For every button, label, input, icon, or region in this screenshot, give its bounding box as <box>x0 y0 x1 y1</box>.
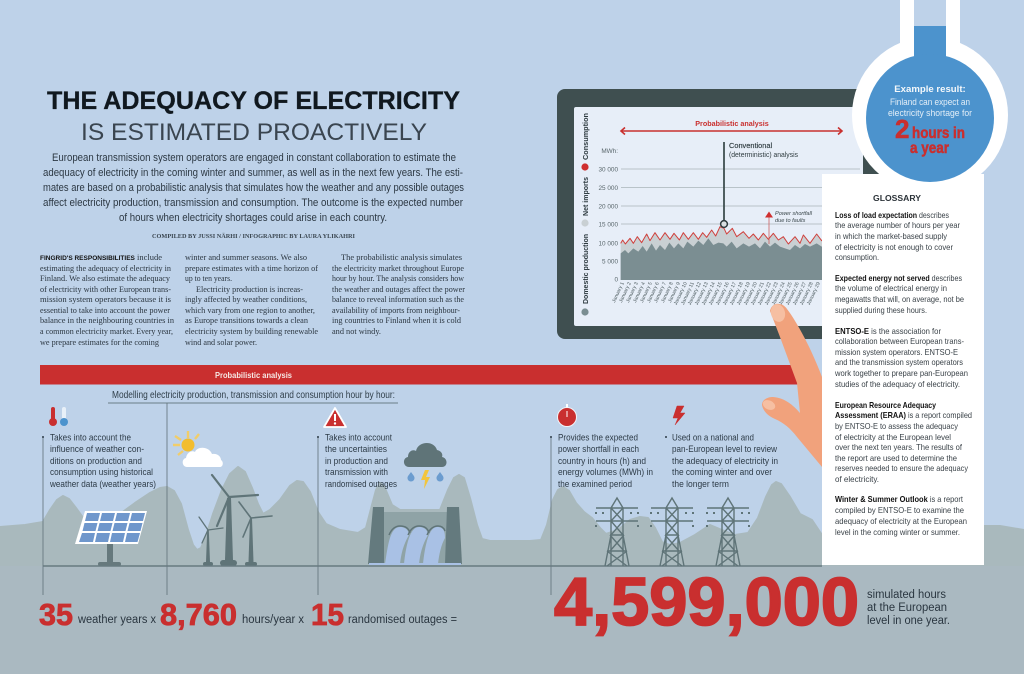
chart y axis: 15 000 <box>598 222 618 228</box>
equation: simulation counts: 8,760 <box>160 597 237 632</box>
example result flask: hours in <box>912 125 965 142</box>
body text column 2: up to ten years. <box>185 273 232 283</box>
chart x axis dates: January 12 <box>687 281 703 306</box>
total caption: level in one year. <box>867 615 950 627</box>
glossary: loss of load expectation: the average number of hours per year <box>835 220 960 230</box>
glossary: ERAA: by ENTSO-E to assess the adequacy <box>835 421 959 431</box>
text: weather: weather data (weather years) <box>49 479 156 490</box>
text: weather: ditions on production and <box>50 456 142 467</box>
body text column 1: of electricity with other European trans- <box>40 284 171 294</box>
marker: conventional analysis <box>721 141 798 227</box>
body text column 3: the weather and outages affect the power <box>332 284 465 294</box>
chart x axis dates: January 25 <box>778 281 794 306</box>
chart x axis dates: January 4 <box>632 281 647 304</box>
glossary: expected energy not served <box>835 273 964 315</box>
glossary: ENTSO-E: collaboration between European trans- <box>835 336 964 346</box>
chart areas <box>621 227 843 280</box>
glossary: expected energy not served: the volume of electrical energy in <box>835 283 947 293</box>
glossary: winter and summer outlook: level in the coming winter or summer. <box>835 527 960 537</box>
chart x axis dates: January 7 <box>653 281 668 304</box>
chart x axis dates: January 8 <box>660 281 675 304</box>
chart y axis: 25 000 <box>598 185 618 192</box>
body text column 1: FINGRID'S RESPONSIBILITIES include <box>40 252 162 262</box>
body text column 2 <box>185 252 318 347</box>
body text column 3 <box>332 252 465 336</box>
chart y axis: 0 <box>614 276 618 284</box>
landscape: mountains and ground <box>0 467 1024 674</box>
body text column 2: winter and summer seasons. We also <box>185 252 307 262</box>
text: weather <box>42 432 156 490</box>
glossary panel: GLOSSARY <box>873 193 921 203</box>
body text column 1: essential to take into account the power <box>40 305 170 315</box>
body text column 1: we prepare estimates for the coming <box>40 337 160 347</box>
chart x axis dates: January 6 <box>646 281 661 304</box>
chart y axis: 10 000 <box>598 240 618 248</box>
equation: simulation counts: hours/year x <box>242 614 304 626</box>
credits: COMPILED BY JUSSI NÄRHI / INFOGRAPHIC BY LAURA YLIKAHRI <box>152 233 355 240</box>
icon: pylon 2 <box>651 498 693 566</box>
glossary: loss of load expectation: of electricity is not enough to cover <box>835 242 953 252</box>
equation: simulation counts: 35 <box>39 597 73 632</box>
chart legend: Domestic production <box>581 234 590 304</box>
text: national review: pan-European level to review <box>672 444 777 455</box>
body text column 2: ingly affected by weather conditions, <box>185 294 307 304</box>
title: IS ESTIMATED PROACTIVELY <box>81 119 427 146</box>
text: power shortfall: power shortfall in each <box>558 444 639 455</box>
intro text: affect electricity production, transmission and consumption. The outcome is the expected number <box>43 197 463 209</box>
glossary: ERAA: the report are used to determine the <box>835 453 957 463</box>
chart x axis dates: January 19 <box>736 281 752 306</box>
icon: lightning bolt <box>673 406 685 425</box>
icon: stopwatch <box>558 404 576 426</box>
chart x axis dates: January 26 <box>785 281 801 306</box>
text: outages <box>317 432 397 490</box>
glossary: loss of load expectation: consumption. <box>835 252 879 262</box>
glossary: ERAA <box>835 400 972 484</box>
chart x axis dates <box>611 281 822 306</box>
tablet with chart <box>557 89 887 339</box>
example result flask <box>852 0 1008 193</box>
chart x axis dates: January 27 <box>792 281 808 306</box>
body text column 1: mission system operators because it is <box>40 294 172 304</box>
chart x axis dates: January 11 <box>680 281 696 306</box>
body text column 3: balance to reveal information such as the <box>332 294 464 304</box>
red bar: probabilistic analysis <box>40 365 802 384</box>
glossary: ENTSO-E <box>834 326 968 389</box>
glossary: loss of load expectation: in which the market-based supply <box>835 231 948 241</box>
chart y axis <box>598 148 860 284</box>
chart x axis dates: January 24 <box>771 281 787 306</box>
ground line <box>43 565 822 567</box>
body text column 1: balance in the neighbouring countries in <box>40 315 175 325</box>
body text column 2: prepare estimates with a time horizon of <box>185 263 318 273</box>
text: power shortfall: the examined period <box>558 479 632 490</box>
icon: hydro dam <box>368 507 462 565</box>
glossary: winter and summer outlook: compiled by ENTSO-E to examine the <box>835 505 964 515</box>
equation: simulation counts: randomised outages = <box>348 614 457 626</box>
chart y axis: 5 000 <box>602 258 618 266</box>
chart x axis dates: January 1 <box>611 281 626 304</box>
title: THE ADEQUACY OF ELECTRICITY <box>47 87 460 115</box>
chart x axis dates: January 9 <box>667 281 682 304</box>
glossary: winter and summer outlook <box>835 494 967 537</box>
intro text <box>43 152 464 224</box>
chart x axis dates: January 5 <box>639 281 654 304</box>
example result flask: Finland can expect an <box>890 96 970 107</box>
glossary: expected energy not served: supplied during these hours. <box>835 305 927 315</box>
body text column 2: as Europe transitions towards a clean <box>185 315 309 325</box>
example result flask: 2 <box>895 114 909 144</box>
total caption: at the European <box>867 602 947 614</box>
intro text: European transmission system operators are engaged in constant collaboration to estimate the <box>52 152 456 164</box>
total caption <box>867 589 950 627</box>
text: national review: Used on a national and <box>672 432 754 444</box>
body text column 2: which vary from one region to another, <box>185 305 315 315</box>
title <box>47 87 460 146</box>
text: power shortfall <box>550 432 653 490</box>
chart x axis dates: January 29 <box>806 281 822 306</box>
marker: power shortfall: due to faults <box>775 218 806 224</box>
chart y axis: MWh: <box>601 148 618 155</box>
chart legend: Net imports <box>581 177 590 216</box>
text: outages: Takes into account <box>325 432 392 444</box>
text: outages: randomised outages <box>325 479 397 490</box>
glossary: ENTSO-E: work together to prepare pan-European <box>834 368 968 378</box>
hand pointing at chart <box>761 302 830 480</box>
equation: simulation counts: weather years x <box>77 614 156 626</box>
chart x axis dates: January 14 <box>701 281 717 306</box>
text: national review: the longer term <box>672 479 729 490</box>
body text column 2: electricity system by building renewable <box>185 326 318 336</box>
body text column 1: estimating the adequacy of electricity in <box>40 263 172 273</box>
glossary: ERAA: of electricity at the European level <box>835 432 951 442</box>
chart y axis: 20 000 <box>598 204 618 210</box>
text: power shortfall: Provides the expected <box>558 432 638 444</box>
chart x axis dates: January 15 <box>708 281 724 306</box>
body text column 1: Finland. We also estimate the adequacy <box>40 273 171 283</box>
text: weather: influence of weather con- <box>50 444 144 455</box>
chart x axis dates: January 28 <box>799 281 815 306</box>
chart legend <box>581 113 590 316</box>
icon: pylon 1 <box>596 498 638 566</box>
total caption: simulated hours <box>867 589 946 601</box>
glossary: expected energy not served: Expected energy not served describes <box>835 273 962 283</box>
chart x axis dates: January 23 <box>764 281 780 306</box>
body text column 2: wind and solar power. <box>185 337 257 347</box>
glossary: ENTSO-E: and the transmission system operators <box>835 357 963 367</box>
glossary: ERAA: Assessment (ERAA) is a report compiled <box>835 410 972 420</box>
chart x axis dates: January 17 <box>722 281 738 306</box>
chart x axis dates: January 13 <box>694 281 710 306</box>
example result flask: Example result: <box>894 84 966 95</box>
body text column 3: availability of imports from neighbour- <box>332 305 460 315</box>
body text column 3: and not windy. <box>332 326 381 336</box>
chart x axis dates: January 10 <box>673 281 689 306</box>
chart x axis dates: January 2 <box>618 281 633 304</box>
glossary: ENTSO-E: ENTSO-E is the association for <box>835 326 941 336</box>
chart arrow: probabilistic analysis: Probabilistic analysis <box>695 119 769 128</box>
chart x axis dates: January 16 <box>715 281 731 306</box>
text: national review: the adequacy of electricity in <box>672 456 778 467</box>
chart x axis dates: January 3 <box>625 281 640 304</box>
text: national review <box>665 432 778 490</box>
text: power shortfall: country in hours (h) and <box>558 456 646 467</box>
body text column 3: The probabilistic analysis simulates <box>341 252 463 262</box>
intro text: adequacy of electricity in the coming winter and summer, as well as in the next few years. The esti- <box>43 167 463 179</box>
icon: wind turbines <box>199 475 272 566</box>
glossary: ENTSO-E: studies of the adequacy of electricity. <box>835 379 960 389</box>
icon: pylon 3 <box>707 498 749 566</box>
marker: power shortfall: Power shortfall <box>775 211 813 217</box>
body text column 1: a common electricity market. Every year, <box>40 326 173 336</box>
icon: thermometers <box>49 407 68 426</box>
text: weather: consumption using historical <box>50 467 153 478</box>
equation: simulation counts: 15 <box>311 597 344 632</box>
text: power shortfall: energy volumes (MWh) in <box>558 467 653 478</box>
glossary: loss of load expectation <box>835 210 960 262</box>
glossary: ERAA: European Resource Adequacy <box>835 400 936 410</box>
body text column 3: the electricity market throughout Europe <box>332 263 464 273</box>
text: outages: transmission with <box>325 467 388 478</box>
chart x axis dates: January 18 <box>729 281 745 306</box>
body text column 1 <box>40 252 175 347</box>
icon: warning triangle <box>324 408 346 427</box>
glossary: winter and summer outlook: Winter & Summer Outlook is a report <box>835 494 964 504</box>
red bar: probabilistic analysis: Probabilistic analysis <box>215 370 292 380</box>
big total: 4,599,000: 4,599,000 <box>554 564 859 640</box>
icon: solar panel <box>75 511 147 566</box>
glossary: expected energy not served: megawatts that will, on average, not be <box>835 294 964 304</box>
chart x axis dates: January 21 <box>750 281 766 306</box>
glossary: ERAA: of electricity. <box>835 474 879 484</box>
text: weather: Takes into account the <box>50 432 131 444</box>
text: outages: in production and <box>325 456 388 467</box>
example result flask: electricity shortage for <box>888 107 972 118</box>
subheading: modelling: Modelling electricity production, transmission and consumption hour by hour: <box>112 390 395 401</box>
glossary panel <box>822 174 984 565</box>
marker: conventional analysis: (deterministic) analysis <box>729 150 798 159</box>
intro text: of hours when electricity shortages could arise in each country. <box>119 212 387 224</box>
marker: conventional analysis: Conventional <box>729 141 773 150</box>
text: national review: the coming winter and over <box>672 467 773 478</box>
body text column 2: Electricity production is increas- <box>196 284 303 294</box>
chart legend: Consumption <box>581 113 590 160</box>
chart y axis: 30 000 <box>598 166 618 174</box>
chart arrow: probabilistic analysis <box>621 119 842 134</box>
text: outages: the uncertainties <box>325 444 387 455</box>
glossary: loss of load expectation: Loss of load expectation describes <box>835 210 949 220</box>
glossary: ERAA: reserves needed to ensure the adequacy <box>835 463 969 473</box>
chart x axis dates: January 22 <box>757 281 773 306</box>
body text column 3: ing countries to Finland when it is cold <box>332 315 462 325</box>
equation: simulation counts <box>39 597 457 632</box>
intro text: mates are based on a probabilistic analysis that simulates how the weather and any possible outages <box>43 182 464 194</box>
example result flask: a year <box>910 140 949 157</box>
icon: storm cloud <box>404 443 446 489</box>
icon: sun and cloud <box>173 431 223 467</box>
glossary: winter and summer outlook: adequacy of electricity at the European <box>835 516 967 526</box>
body text column 3: hour by hour. The analysis considers how <box>332 273 465 283</box>
glossary: ERAA: over the next ten years. The results of <box>835 442 963 452</box>
glossary: ENTSO-E: mission system operators. ENTSO-E <box>835 347 958 357</box>
chart x axis dates: January 20 <box>743 281 759 306</box>
marker: power shortfall <box>765 211 813 244</box>
